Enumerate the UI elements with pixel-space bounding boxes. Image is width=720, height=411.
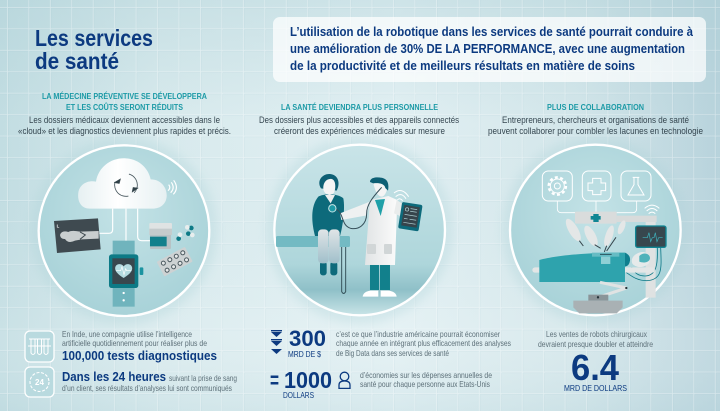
icon: downward triangles <box>271 330 282 354</box>
illustration: doctor and patient <box>266 137 453 323</box>
icon: cloud <box>78 158 167 209</box>
panel: médecine préventive text: LA MÉDECINE PRÉVENTIVE SE DÉVELOPPERA <box>42 91 207 101</box>
icon: test tubes <box>25 331 54 362</box>
stat: 6.4 mrd de dollars <box>538 330 653 393</box>
stat: 1000 dollars: DOLLARS <box>283 391 314 400</box>
icon: doctor <box>329 177 407 297</box>
headline callout: de la productivité et de meilleurs résultats en matière de soins <box>290 58 635 73</box>
panel: médecine préventive text: Les dossiers médicaux deviennent accessibles dans le <box>29 115 220 125</box>
icon: gear <box>542 171 572 201</box>
headline callout <box>273 17 706 82</box>
icon: 24 hour clock <box>25 367 54 397</box>
text: économies industrie <box>336 330 511 358</box>
icon: medicine jar <box>149 223 172 249</box>
stat: 6.4 mrd de dollars: 6.4 <box>571 347 619 388</box>
stat: 300 MRD DE $: MRD DE $ <box>288 350 321 359</box>
icon: wifi signal <box>168 180 176 194</box>
title: Les services <box>35 25 153 51</box>
panel: médecine préventive text <box>18 91 231 136</box>
text: économies par personne <box>360 371 492 389</box>
illustration: surgical robot <box>502 137 689 323</box>
panel: collaboration text: PLUS DE COLLABORATION <box>547 102 644 112</box>
panel: collaboration text <box>488 102 703 136</box>
text: économies industrie: de Big Data dans ses services de santé <box>336 349 449 358</box>
stat: 100,000 tests: artificielle quotidiennement pour réaliser plus de <box>62 339 207 348</box>
icon: medical cross <box>582 171 611 201</box>
stat: dans les 24 heures: Dans les 24 heures <box>62 369 166 384</box>
panel: collaboration text: Entrepreneurs, chercheurs et organisations de santé <box>502 115 689 125</box>
icon: patient under drape <box>532 252 655 282</box>
icon: 24 hour clock: 24 <box>35 378 44 387</box>
stat: 1000 dollars: 1000 <box>284 367 332 393</box>
stat: 100,000 tests <box>62 330 217 363</box>
stat: 6.4 mrd de dollars: Les ventes de robots chirurgicaux <box>546 330 647 339</box>
panel: santé personnelle text: LA SANTÉ DEVIENDRA PLUS PERSONNELLE <box>281 102 438 112</box>
panel: médecine préventive text: «cloud» et les diagnostics deviennent plus rapides et précis. <box>18 126 231 136</box>
text: économies industrie: c’est ce que l’industrie américaine pourrait économiser <box>336 330 500 339</box>
panel: santé personnelle text: créeront des expériences médicales sur mesure <box>274 126 445 136</box>
icon: wifi signal <box>645 205 659 214</box>
icon: capsules <box>176 225 195 241</box>
panel: santé personnelle text: Des dossiers plus accessibles et des appareils connectés <box>259 115 459 125</box>
stat: 6.4 mrd de dollars: devraient presque doubler et atteindre <box>538 340 653 349</box>
icon: smart watch <box>109 241 143 307</box>
icon: monitor <box>625 226 666 281</box>
illustration: cloud and connected devices <box>31 137 217 324</box>
text: économies par personne: santé pour chaque personne aux Etats-Unis <box>360 380 490 389</box>
stat: dans les 24 heures: d’un client, ses résultats d’analyses lui sont communiqués <box>62 384 232 393</box>
stat: 300 MRD DE $: 300 <box>289 326 326 351</box>
icon: patient on table <box>276 174 350 293</box>
title: de santé <box>35 48 119 74</box>
icon: flask <box>621 171 651 201</box>
icon: x-ray <box>54 218 101 253</box>
operating table base <box>573 282 627 313</box>
panel: santé personnelle text <box>259 102 459 136</box>
icon: tablet <box>398 202 423 231</box>
stat: 6.4 mrd de dollars: MRD DE DOLLARS <box>564 383 627 393</box>
text: économies par personne: d’économies sur les dépenses annuelles de <box>360 371 492 380</box>
stat: 1000 dollars: = <box>270 367 279 393</box>
stat: dans les 24 heures: suivant la prise de sang <box>169 374 237 383</box>
stat: 100,000 tests: 100,000 tests diagnostiques <box>62 348 217 363</box>
title <box>35 25 153 74</box>
icon: person <box>339 372 350 388</box>
icon: wifi signal <box>394 191 409 201</box>
text: économies industrie: chaque année en intégrant plus efficacement des analyses <box>336 339 511 348</box>
stat: 100,000 tests: En Inde, une compagnie utilise l’intelligence <box>62 330 192 339</box>
stat: 1000 dollars <box>270 367 332 400</box>
icon: blister pack <box>157 247 193 277</box>
stat: dans les 24 heures <box>62 369 237 393</box>
robot arms <box>563 212 657 298</box>
icon: x-ray: L <box>57 224 60 229</box>
panel: médecine préventive text: ET LES COÛTS SERONT RÉDUITS <box>66 101 183 112</box>
